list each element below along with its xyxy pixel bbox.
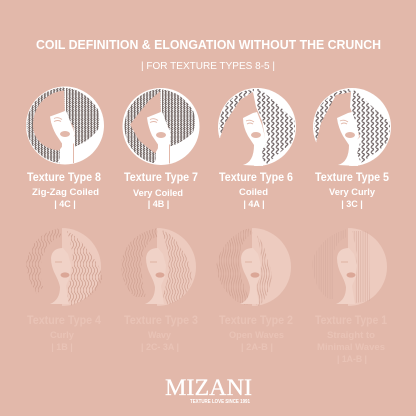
label: Texture Type 2 xyxy=(219,315,293,327)
code: | 4C | xyxy=(54,199,76,209)
icon: zig-zag coiled hair portrait xyxy=(26,86,104,164)
icon: very coiled hair portrait xyxy=(122,88,200,165)
description line 2: Minimal Waves xyxy=(317,342,385,352)
code: | 1B | xyxy=(51,342,73,352)
code: | 2C- 3A | xyxy=(141,342,179,352)
code: | 4A | xyxy=(243,199,265,209)
code: | 1A-B | xyxy=(337,354,367,364)
panel: texture type 3 (faded) xyxy=(121,228,198,352)
code: | 3C | xyxy=(341,199,363,209)
title: COIL DEFINITION & ELONGATION WITHOUT THE CRUNCH xyxy=(36,38,381,52)
description: Open Waves xyxy=(229,330,284,340)
label: Texture Type 4 xyxy=(27,315,102,327)
label: Texture Type 1 xyxy=(315,315,388,327)
panel: texture type 7 xyxy=(122,88,200,209)
description: Zig-Zag Coiled xyxy=(32,187,99,197)
tagline: TEXTURE LOVE SINCE 1991 xyxy=(190,399,250,405)
description: Curly xyxy=(50,330,74,340)
label: Texture Type 3 xyxy=(124,315,198,327)
description: Very Curly xyxy=(329,187,375,197)
panel: texture type 2 (faded) xyxy=(216,228,293,352)
icon: curly hair portrait xyxy=(26,228,102,306)
panel: texture type 8 xyxy=(26,86,104,209)
wordmark: MIZANI xyxy=(165,375,252,400)
description line 1: Straight to xyxy=(327,330,376,340)
icon: wavy hair portrait xyxy=(121,228,196,306)
code: | 4B | xyxy=(148,199,169,209)
description: Very Coiled xyxy=(133,188,183,198)
panel: texture type 4 (faded) xyxy=(26,228,102,352)
description: Coiled xyxy=(239,187,268,197)
label: Texture Type 6 xyxy=(219,172,293,184)
panel: texture type 5 xyxy=(306,88,392,209)
icon: straight hair portrait xyxy=(312,228,387,306)
icon: open waves portrait xyxy=(216,228,291,307)
subtitle: | FOR TEXTURE TYPES 8-5 | xyxy=(141,60,275,72)
description: Wavy xyxy=(148,330,171,340)
code: | 2A-B | xyxy=(241,342,273,352)
label: Texture Type 5 xyxy=(315,172,390,184)
label: Texture Type 8 xyxy=(27,172,102,184)
panel: texture type 6 xyxy=(211,88,297,209)
infographic canvas xyxy=(26,40,391,403)
icon: very curly hair portrait xyxy=(313,88,391,166)
icon: coiled hair portrait xyxy=(218,88,296,166)
label: Texture Type 7 xyxy=(124,172,198,184)
panel: texture type 1 (faded) xyxy=(312,228,388,364)
logo xyxy=(165,375,252,405)
